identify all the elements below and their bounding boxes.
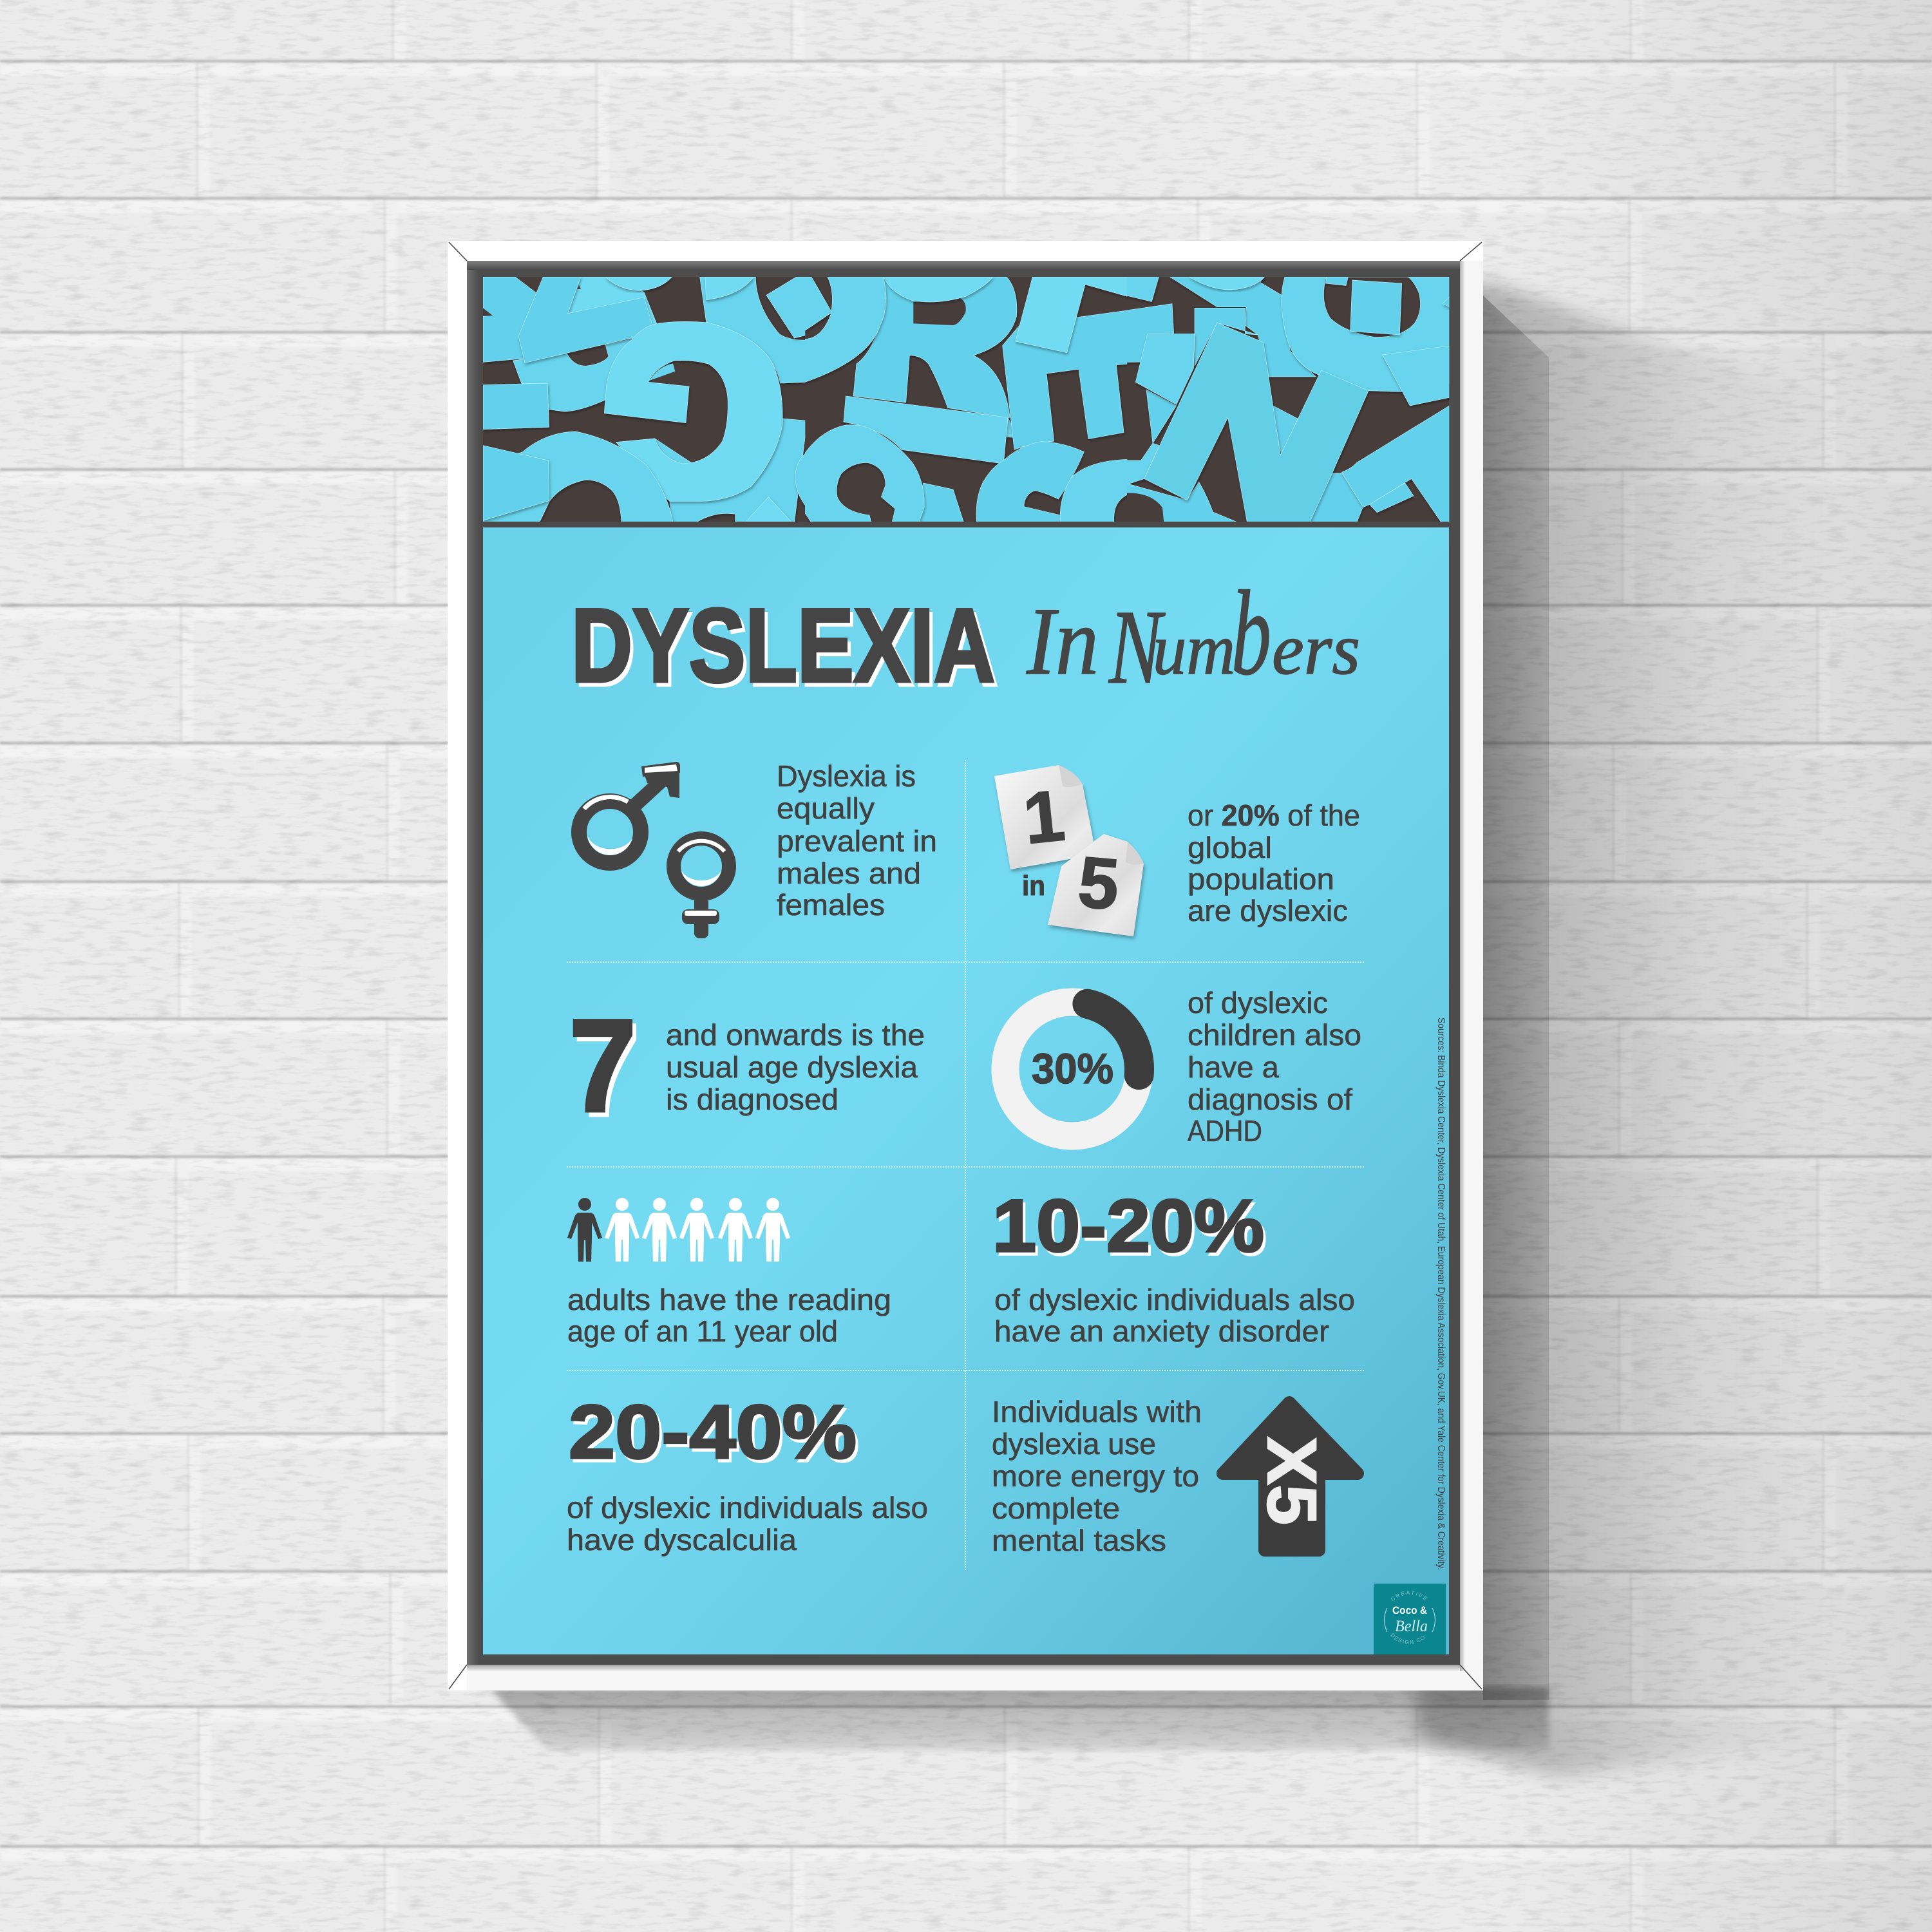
text: reading age: adults have the reading <box>567 1283 891 1316</box>
icon: row of six people <box>567 1198 790 1262</box>
poster <box>483 277 1449 1654</box>
icon: female symbol <box>674 838 729 938</box>
text: usual age of diagnosis <box>666 1018 925 1116</box>
chart: 30% donut: 30% <box>1032 1045 1113 1092</box>
cell: five times more energy <box>992 1395 1358 1557</box>
text: more energy: dyslexia use <box>992 1427 1156 1461</box>
text: more energy <box>992 1395 1202 1557</box>
subtitle: In Numbers: ers <box>1272 609 1360 690</box>
logo: Coco & Bella: Coco & <box>1392 1604 1427 1616</box>
logo: Coco & Bella: DESIGN CO <box>1390 1633 1425 1645</box>
cell: adults reading age <box>567 1198 891 1348</box>
text: more energy: complete <box>992 1492 1120 1525</box>
logo: Coco & Bella: CREATIVE <box>1391 1591 1427 1601</box>
text: more energy: more energy to <box>992 1459 1199 1493</box>
header image: scattered paper letters <box>483 277 1451 523</box>
text: usual age of diagnosis: usual age dyslexia <box>666 1050 918 1084</box>
text: ADHD diagnosis: of dyslexic <box>1188 986 1328 1019</box>
text: more energy: mental tasks <box>992 1524 1166 1557</box>
subtitle: In Numbers: um <box>1153 609 1235 690</box>
text: anxiety disorder <box>994 1283 1355 1348</box>
text: anxiety disorder: of dyslexic individuals also <box>994 1283 1355 1316</box>
text: equally prevalent: equally <box>777 791 875 825</box>
text: anxiety disorder: have an anxiety disorder <box>994 1314 1329 1348</box>
text: equally prevalent: Dyslexia is <box>777 759 916 793</box>
subtitle: In Numbers: In <box>1026 588 1099 695</box>
logo: Coco & Bella: Bella <box>1395 1618 1428 1635</box>
icon: 5 paper note: 5 <box>1075 842 1122 925</box>
text: ADHD diagnosis: diagnosis of <box>1188 1083 1352 1116</box>
cell: age 7 <box>569 992 925 1139</box>
text: usual age of diagnosis: is diagnosed <box>666 1083 838 1116</box>
text: dyscalculia: of dyslexic individuals also <box>567 1491 928 1524</box>
number: 20-40%: 20-40% <box>569 1390 857 1475</box>
poster background <box>483 277 1449 1654</box>
text: equally prevalent: females <box>777 888 885 922</box>
label: in: in <box>1022 870 1045 902</box>
frame drop shadow <box>489 283 1835 1777</box>
text: ADHD diagnosis <box>1188 986 1361 1148</box>
subtitle: In Numbers: N <box>1108 588 1166 706</box>
text: dyscalculia: have dyscalculia <box>567 1523 797 1557</box>
grid dividers <box>567 760 1365 1571</box>
text: more energy: Individuals with <box>992 1395 1202 1428</box>
cell: 1 in 5 <box>994 765 1360 936</box>
text: reading age <box>567 1283 891 1348</box>
text: 20% of global population: global <box>1188 831 1272 864</box>
text: usual age of diagnosis: and onwards is the <box>666 1018 925 1052</box>
icon: male symbol <box>579 762 680 863</box>
text: dyscalculia <box>567 1491 928 1557</box>
subtitle: In Numbers: b <box>1231 565 1271 700</box>
text: 20% of global population: or 20% of the <box>1188 799 1360 832</box>
icon: up arrow with x5: X5 <box>1253 1437 1331 1525</box>
icon: 1 paper note: 1 <box>1020 775 1068 859</box>
number: 7: 7 <box>569 992 636 1139</box>
text: ADHD diagnosis: children also <box>1188 1018 1361 1052</box>
icon: up arrow with x5 <box>1223 1403 1358 1550</box>
chart: 30% donut <box>1005 1002 1139 1136</box>
sources note: Sources: Binda Dyslexia Center, Dyslexia Center of Utah, European Dyslexia Association, Gov.UK, and Yale Center for Dyslexia & Creativity. <box>1435 1018 1446 1570</box>
text: equally prevalent: prevalent in <box>777 824 937 858</box>
text: ADHD diagnosis: ADHD <box>1188 1114 1262 1148</box>
number: 10-20%: 10-20% <box>992 1185 1264 1267</box>
text: reading age: age of an 11 year old <box>567 1314 838 1348</box>
logo: Coco & Bella <box>1374 1584 1446 1654</box>
header divider bar <box>483 522 1449 527</box>
text: equally prevalent: males and <box>777 857 921 890</box>
text: 20% of global population: population <box>1188 862 1334 896</box>
icon: 1 paper note <box>994 765 1096 869</box>
cell: 30% ADHD <box>1005 986 1361 1148</box>
picture frame <box>448 241 1483 1690</box>
text: 20% of global population <box>1188 799 1360 927</box>
title: DYSLEXIA: DYSLEXIA <box>571 587 995 704</box>
text: equally prevalent <box>777 759 937 922</box>
icon: 5 paper note <box>1048 834 1144 936</box>
text: ADHD diagnosis: have a <box>1188 1050 1279 1084</box>
cell: dyscalculia <box>567 1390 928 1557</box>
cell: equally prevalent <box>579 759 937 938</box>
text: 20% of global population: are dyslexic <box>1188 894 1348 927</box>
cell: anxiety disorder <box>992 1185 1355 1348</box>
